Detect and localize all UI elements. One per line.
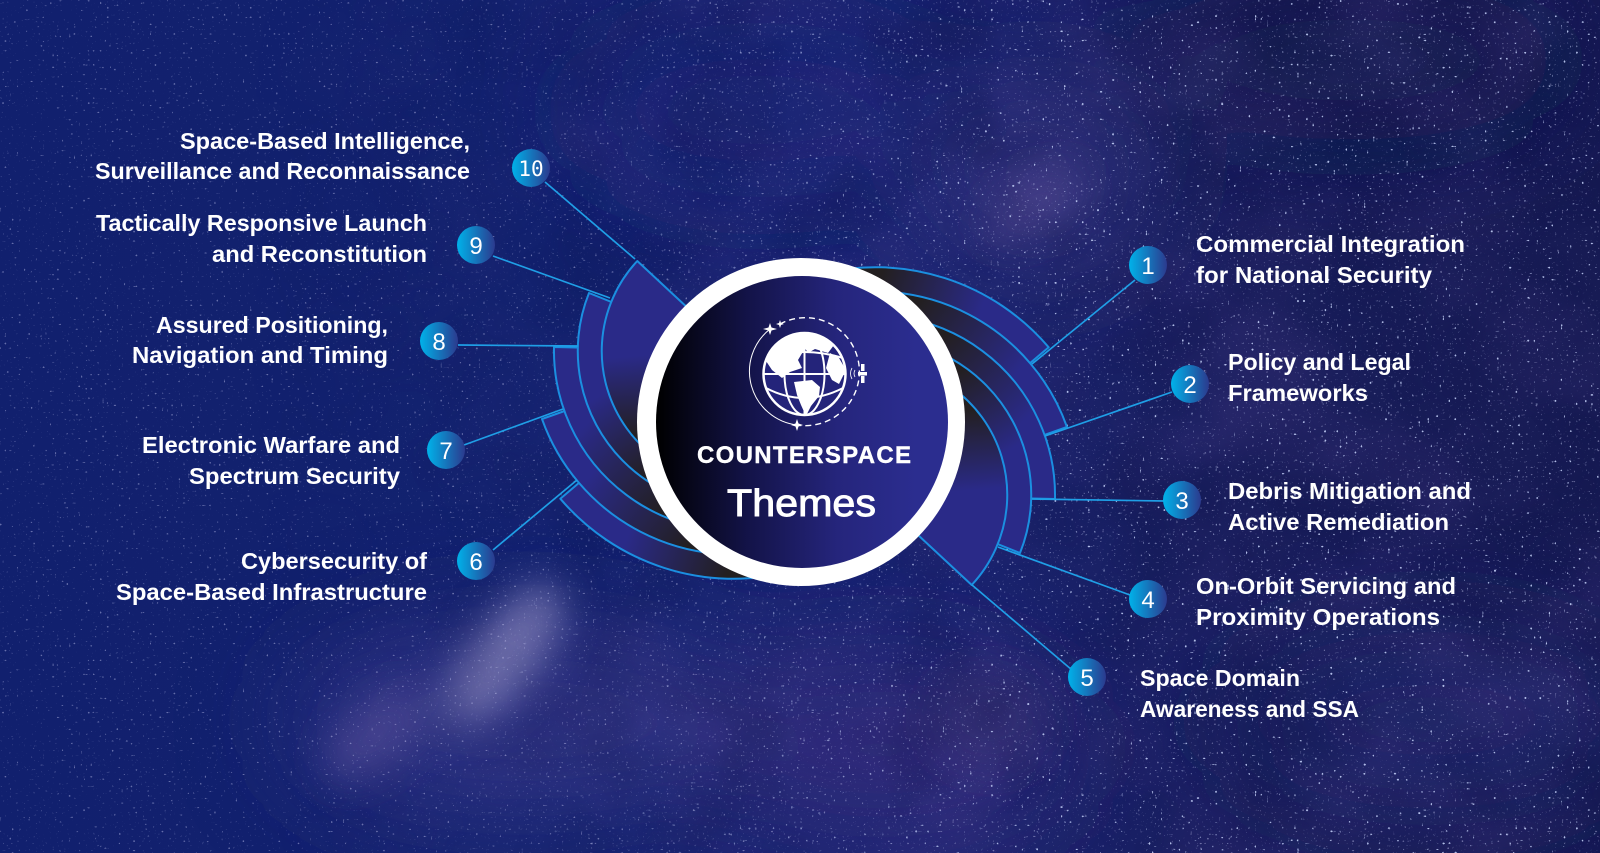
badges: 3 bbox=[1175, 488, 1189, 515]
labels: Assured Positioning, bbox=[156, 312, 388, 338]
labels: Navigation and Timing bbox=[132, 342, 388, 368]
labels: Space-Based Infrastructure bbox=[116, 579, 427, 605]
title: Themes: Themes bbox=[727, 483, 876, 525]
labels: Frameworks bbox=[1228, 380, 1368, 406]
center circle bbox=[637, 258, 965, 586]
labels: Electronic Warfare and bbox=[142, 432, 400, 458]
left fan segments 6 to 10 bbox=[542, 261, 789, 579]
badges: 2 bbox=[1183, 372, 1197, 399]
labels: Cybersecurity of bbox=[241, 548, 427, 574]
labels: Tactically Responsive Launch bbox=[96, 210, 427, 236]
badges: 9 bbox=[469, 233, 483, 260]
labels: Space-Based Intelligence, bbox=[180, 128, 470, 154]
labels: Awareness and SSA bbox=[1140, 696, 1359, 722]
labels: On-Orbit Servicing and bbox=[1196, 573, 1456, 599]
badges: 10 bbox=[518, 157, 544, 181]
labels: Debris Mitigation and bbox=[1228, 478, 1471, 504]
badges: 8 bbox=[432, 329, 446, 356]
labels: Active Remediation bbox=[1228, 509, 1449, 535]
labels: Commercial Integration bbox=[1196, 231, 1465, 257]
labels: for National Security bbox=[1196, 262, 1432, 288]
badges: 6 bbox=[469, 549, 483, 576]
right fan segments 1 to 5 bbox=[820, 267, 1067, 585]
badges bbox=[420, 149, 1209, 696]
labels: Proximity Operations bbox=[1196, 604, 1440, 630]
icon: globe with orbit and satellite bbox=[749, 318, 867, 431]
title: COUNTERSPACE: COUNTERSPACE bbox=[697, 442, 911, 469]
badges: 1 bbox=[1141, 253, 1155, 280]
labels bbox=[95, 128, 1471, 722]
labels: Spectrum Security bbox=[189, 463, 400, 489]
badges: 4 bbox=[1141, 587, 1155, 614]
labels: Policy and Legal bbox=[1228, 349, 1411, 375]
badges: 5 bbox=[1080, 665, 1094, 692]
connector lines bbox=[458, 182, 1172, 670]
badges: 7 bbox=[439, 438, 453, 465]
labels: Surveillance and Reconnaissance bbox=[95, 158, 470, 184]
main diagram bbox=[96, 132, 1470, 717]
labels: and Reconstitution bbox=[212, 241, 427, 267]
labels: Space Domain bbox=[1140, 665, 1300, 691]
